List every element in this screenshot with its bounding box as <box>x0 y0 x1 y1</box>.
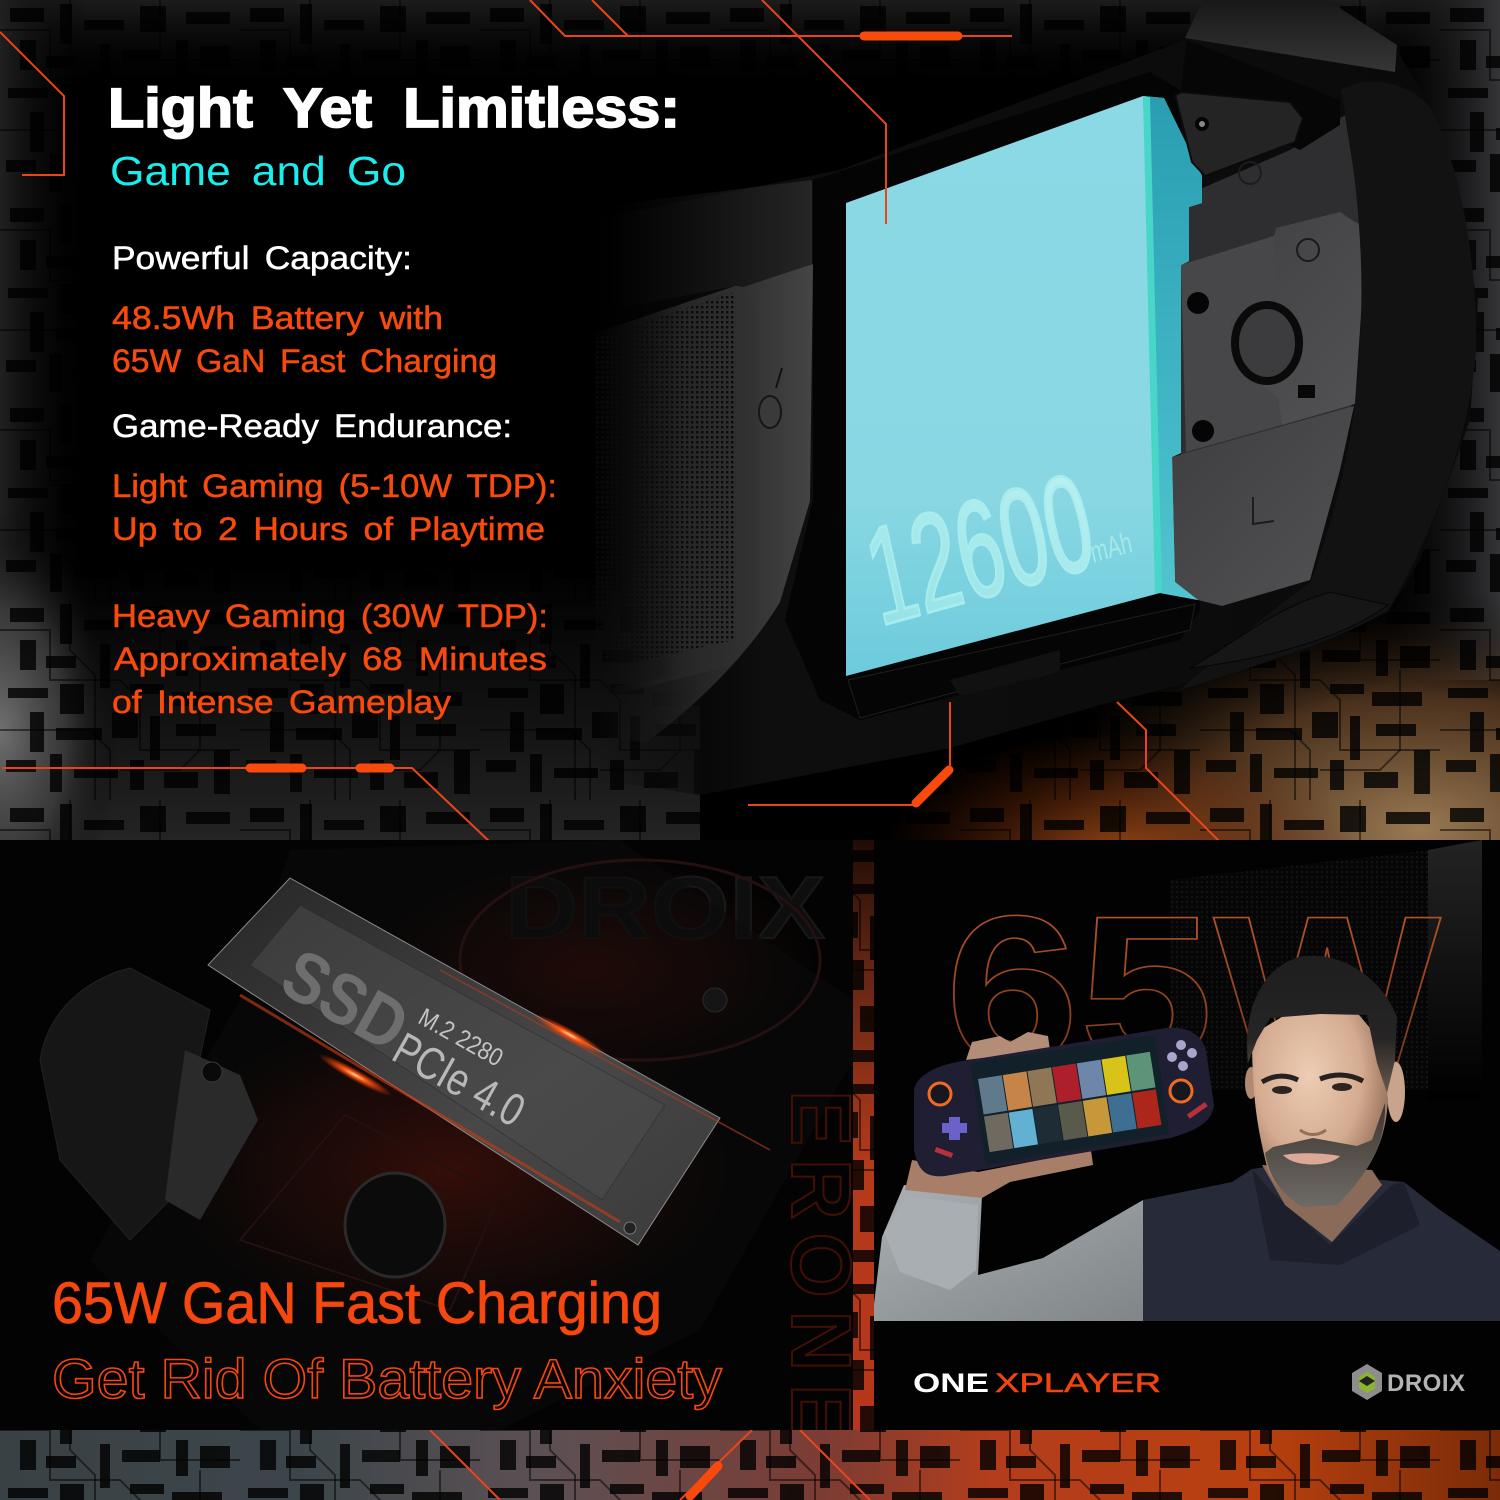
outlined subheadline: Get Rid Of Battery Anxiety <box>52 1347 722 1410</box>
text block: battery features: Up to 2 Hours of Playtime <box>112 511 545 547</box>
headline: 65W GaN Fast Charging <box>52 1271 662 1336</box>
outlined 65W numeral: 65W <box>945 872 1441 1107</box>
Droix logo: DROIX <box>1387 1370 1465 1397</box>
beard <box>1265 1103 1385 1207</box>
text block: battery features: Light Gaming (5-10W TDP): <box>112 468 557 504</box>
panel: device with battery photo <box>590 0 1478 795</box>
console controls <box>929 1083 951 1105</box>
title: Game and Go <box>110 148 406 194</box>
vertical brand watermark: ERONE <box>774 1090 868 1440</box>
man <box>872 956 1500 1321</box>
top trigger <box>1175 92 1303 176</box>
text block: battery features: of Intense Gameplay <box>112 684 451 720</box>
OneXPlayer logo: ONE <box>913 1368 989 1398</box>
gray inner plates <box>1172 115 1366 606</box>
text block: battery features: Heavy Gaming (30W TDP): <box>112 598 548 634</box>
OneXPlayer logo <box>913 1368 1161 1398</box>
handheld console <box>914 1028 1214 1176</box>
OneXPlayer logo: XPLAYER <box>995 1368 1161 1398</box>
battery capacity label: mAh <box>1087 526 1135 570</box>
battery bay edge <box>785 72 1200 720</box>
gray sleeve <box>872 1185 1160 1321</box>
Droix logo <box>1352 1364 1465 1400</box>
text block: battery features: Powerful Capacity: <box>112 240 412 276</box>
SSD module: M.2 2280 <box>414 1003 508 1072</box>
top bumper <box>1180 0 1397 150</box>
watermark logo: DROIX <box>505 858 825 957</box>
grip ribs <box>1190 592 1388 668</box>
game library tiles <box>978 1052 1161 1152</box>
text block: battery features <box>112 240 557 720</box>
background device photo <box>945 840 1482 1107</box>
title: Light Yet Limitless: <box>108 76 680 139</box>
neck <box>1262 1165 1382 1242</box>
text block: battery features: 65W GaN Fast Charging <box>112 343 497 379</box>
face <box>1252 1014 1388 1195</box>
vent strip <box>610 180 812 310</box>
console screen <box>970 1035 1169 1165</box>
battery <box>846 96 1202 676</box>
text block: battery features: Game-Ready Endurance: <box>112 408 512 444</box>
forearm and hand <box>905 1150 1093 1198</box>
text block: battery features: 48.5Wh Battery with <box>112 300 443 336</box>
battery capacity label: 12600 <box>853 444 1106 655</box>
text block: battery features: Approximately 68 Minutes <box>114 641 547 677</box>
SSD module <box>208 878 720 1245</box>
title <box>108 76 680 194</box>
battery capacity label <box>853 434 1141 655</box>
device outline <box>40 858 822 1311</box>
side shell <box>595 264 813 742</box>
red glow <box>232 1060 629 1294</box>
hoodie <box>1143 1165 1500 1321</box>
bottom connector strip <box>848 604 1195 718</box>
panel: man holding handheld <box>872 840 1500 1430</box>
eyebrows and eyes <box>1262 1075 1363 1082</box>
hair <box>1247 956 1397 1093</box>
ears <box>1245 1067 1254 1099</box>
orange light streaks <box>240 970 770 1222</box>
speaker panel <box>595 286 757 700</box>
SSD module: SSD <box>269 934 421 1067</box>
device body <box>590 0 1478 795</box>
brand footer <box>874 1321 1500 1430</box>
panel: SSD and fast charging <box>0 840 868 1440</box>
SSD module: PCIe 4.0 <box>385 1022 534 1137</box>
right grip <box>1180 82 1476 690</box>
